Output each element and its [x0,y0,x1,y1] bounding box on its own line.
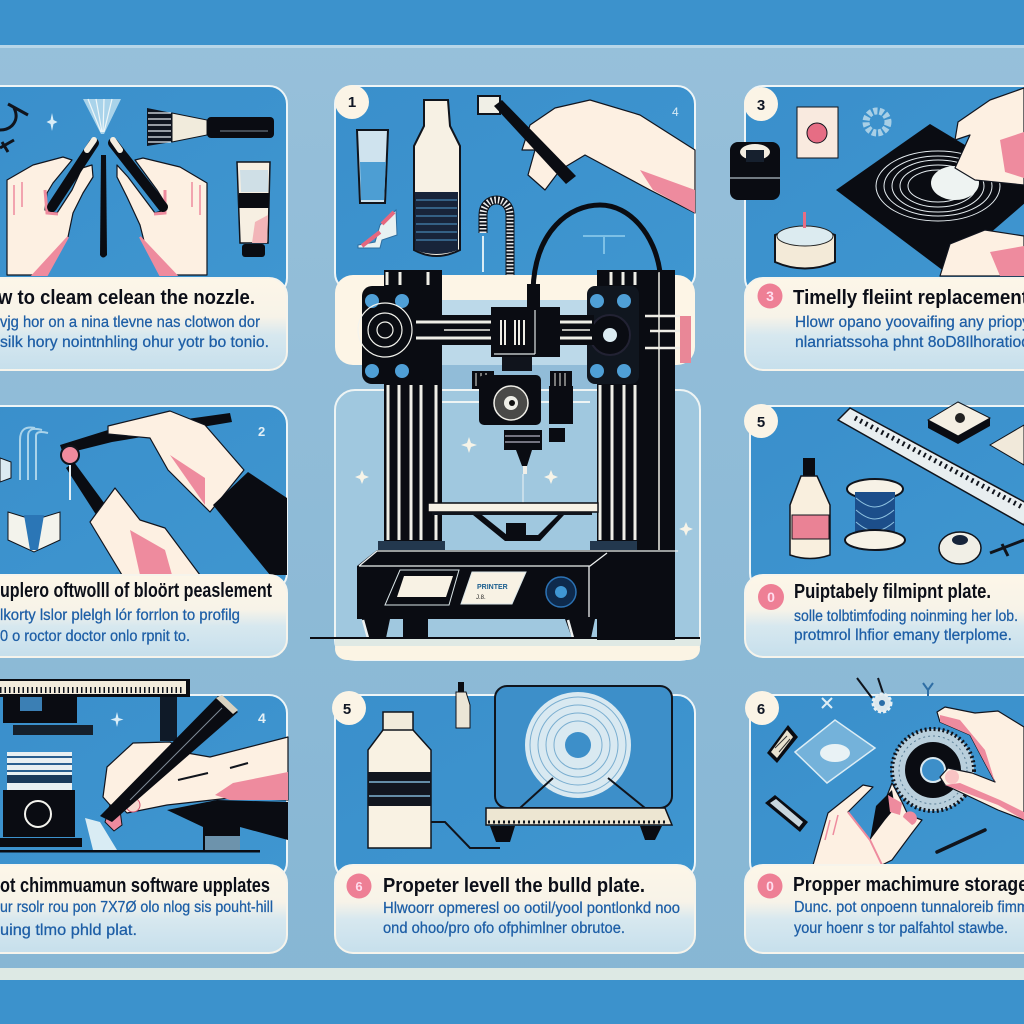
icon: machine body [0,752,82,847]
table line [0,850,260,852]
icon: clear bag [795,720,875,783]
tool: left stick [52,140,94,207]
icon: bottle [414,100,460,256]
icon: dropper bottle [790,458,830,558]
hand: lower [90,488,200,575]
icon: ring [730,142,780,200]
body text: Hlwoorr opmeresl oo ootil/yool pontlonkd noo [383,900,680,917]
icon: gear wheel [892,729,974,811]
icon: small block [990,425,1024,465]
sparkles [355,437,693,536]
plate [836,124,1024,272]
icon: cake [775,212,835,268]
body text line 2: ond ohoo/pro ofo ofphimlner obrutoe. [383,920,625,937]
body text line 2: silk hory nointnhling ohur yotr bo tonio. [0,334,269,351]
carriage [491,307,560,357]
hand: right [937,707,1024,820]
heading: Propeter levell the bulld plate. [383,875,645,897]
number: 1 [348,94,356,111]
body text line 2: your hoenr s tor palfahtol stawbe. [794,920,1008,937]
icon: bracket [0,104,28,152]
icon: disc [939,532,981,564]
cable [431,822,500,848]
icon: nut [0,458,11,482]
right rail stubs [640,315,691,363]
body text line 2: uing tlmo phld plat. [0,922,137,939]
hand: left [7,157,93,275]
number [332,691,366,725]
screen [495,686,672,808]
panel: machine storage [745,678,1024,953]
number badge [758,584,784,610]
caption [0,278,287,370]
body text line 2: protmrol lhfior emany tlerplome. [794,627,1012,644]
icon: cartridge [456,682,470,728]
screen left [385,570,459,605]
number: 5 [343,701,351,718]
panel: filament plate [744,402,1024,657]
icon: small spring tube [483,200,510,308]
hand: upper [108,411,244,512]
icon: ruler [838,408,1024,525]
icon: brush tip [85,818,117,850]
body text: ur rsolr rou pon 7X7Ø olo nlog sis pouht-hill [0,899,273,916]
black support under arm [167,800,288,850]
tool [60,413,232,555]
number badge: 6 [355,879,363,894]
icon: metal strip [765,795,808,832]
icon: center rod [100,155,107,258]
icon: gear [866,111,888,133]
number: 5 [757,414,765,431]
number: 3 [757,97,765,114]
number badge: 0 [767,589,775,605]
number tick: 4 [672,105,679,119]
icon: ruler [0,679,190,697]
left motor [358,286,424,384]
screen right [461,572,526,604]
floor line [310,637,700,639]
legs highlight [363,620,573,638]
cable connector [527,284,540,308]
build plate base [486,808,672,842]
caption [745,865,1024,953]
body text: lkorty lslor plelgh lór forrlon to profilg [0,607,240,624]
caption [0,865,287,953]
hand: right [117,158,207,275]
sleeve [213,472,287,575]
icon: cotton swab [937,830,985,852]
icon: small fittings [822,678,933,712]
cable [533,205,660,290]
body text line 2: 0 o roctor doctor onlo rpnit to. [0,628,190,645]
hand with arm [103,737,288,831]
panel: clean tools [335,85,695,308]
panel: printer frame backdrop [335,275,700,660]
screen right: PRINTER [477,584,508,591]
right column [597,270,675,640]
icon: scraper [478,96,576,184]
icon: square block [928,402,990,444]
sparkle [110,712,124,727]
hand: bottom [940,230,1024,276]
number: 6 [757,701,765,718]
caption [335,865,695,953]
icon: nozzle piece [8,512,60,552]
caption [0,575,287,657]
body text line 2: nlanriatssoha phnt 8oD8Ilhoratiod [795,334,1024,351]
icon: hex key [20,428,48,480]
panel: software updates [0,679,288,953]
icon: spool [845,479,905,550]
icon: pen [100,695,238,822]
number [335,85,369,119]
body text: vjg hor on a nina tlevne nas clotwon dor [0,314,260,331]
panel: clean the nozzle [0,86,287,370]
icon: beaker [357,130,388,203]
number badge [758,874,782,898]
number: 4 [258,710,266,726]
icon: card [797,107,838,158]
icon: T mark [583,236,625,254]
number badge: 0 [766,878,774,894]
build plate [428,503,598,541]
panel: level the build plate [332,682,695,953]
number [744,404,778,438]
icon: bottle [368,712,431,848]
hand: top [955,88,1024,185]
legs [520,778,645,808]
number badge: 3 [766,288,774,304]
panel: blade replacement [0,406,287,657]
hand [522,100,695,213]
icon: tube [237,162,270,257]
power button [546,577,576,607]
hand: left [813,783,922,865]
spiral rings [876,151,1000,221]
screen right: J.8. [476,595,486,601]
caption [745,278,1024,370]
sparkle [46,113,58,131]
right motor [587,286,639,384]
heading: ot chimmuamun software upplates [0,875,270,897]
base [357,541,678,638]
left column [384,270,442,545]
top banner [0,0,1024,48]
tool: right stick [113,140,163,207]
bottom banner [0,968,1024,1024]
heading: w to cleam celean the nozzle. [0,287,255,309]
icon: pin [990,540,1024,556]
hotend [472,357,573,506]
icon: brush [147,108,274,146]
heading: uplero oftwolll of bloört peaslement [0,580,272,602]
heading: Puiptabely filmipnt plate. [794,581,991,603]
icon: nozzle spray [83,99,121,134]
rails [416,315,594,345]
icon: steps [358,210,397,248]
number: 2 [258,424,265,439]
panel: filament replacement [730,86,1024,370]
caption [745,575,1024,657]
number [744,87,778,121]
number badge [758,284,782,308]
3D printer [310,205,700,640]
number badge [346,874,372,898]
icon: machine head [3,697,177,741]
icon: bracket [767,725,798,763]
spiral disc [525,692,631,798]
number [745,691,779,725]
